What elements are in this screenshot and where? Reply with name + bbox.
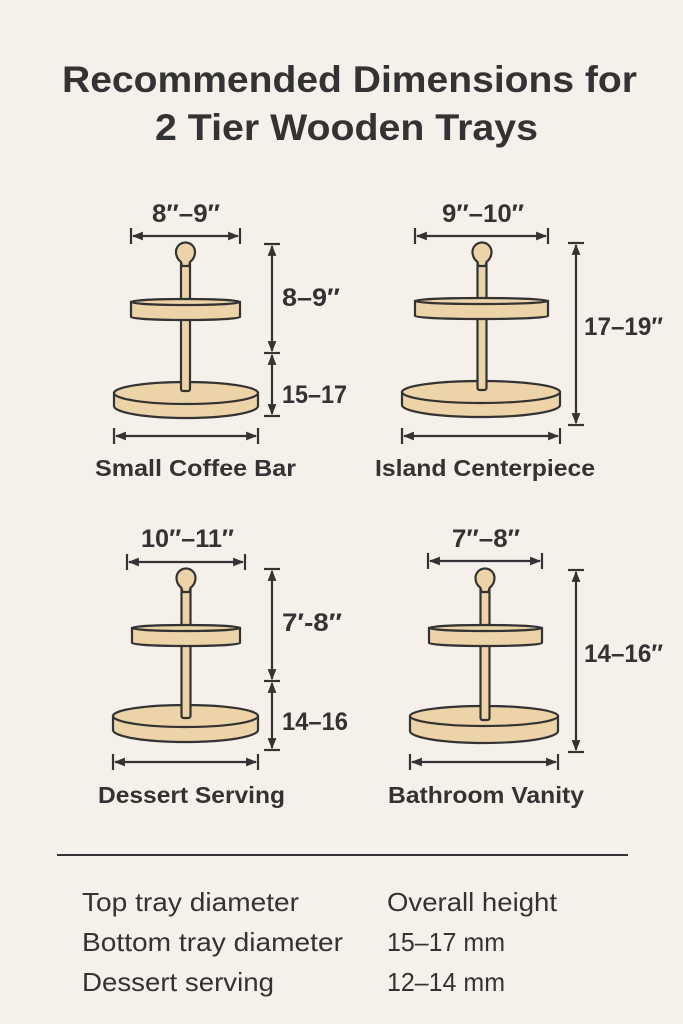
title	[62, 59, 637, 148]
panel: dessert serving: Dessert Serving	[98, 782, 285, 808]
table: dimensions	[82, 887, 558, 997]
stand illustration	[410, 568, 558, 743]
stand illustration	[113, 568, 258, 742]
panel: dessert serving: 7′-8″	[282, 609, 342, 637]
width arrow bottom	[114, 428, 258, 444]
panel: dessert serving: 14–16	[282, 708, 348, 736]
height arrows	[264, 244, 280, 416]
panel: island centerpiece: 9″–10″	[442, 200, 524, 228]
table: dimensions: Dessert serving	[82, 967, 274, 997]
stand illustration	[114, 242, 258, 418]
panel: bathroom vanity	[388, 525, 663, 808]
table: dimensions: Top tray diameter	[82, 887, 299, 917]
title: Recommended Dimensions for	[62, 59, 637, 100]
title: 2 Tier Wooden Trays	[155, 107, 538, 148]
panel: small coffee bar: 8–9″	[282, 284, 340, 312]
table: dimensions: 12–14 mm	[387, 967, 505, 997]
panel: island centerpiece: Island Centerpiece	[375, 455, 595, 481]
panel: small coffee bar: 15–17	[282, 381, 347, 409]
table: dimensions: Bottom tray diameter	[82, 927, 343, 957]
panel: small coffee bar	[95, 200, 347, 481]
table: dimensions: Overall height	[387, 887, 558, 917]
panel: bathroom vanity: 14–16″	[584, 640, 663, 668]
panel: island centerpiece	[375, 200, 663, 481]
panel: dessert serving: 10″–11″	[141, 525, 234, 553]
stand illustration	[402, 242, 560, 417]
panel: small coffee bar: 8″–9″	[152, 200, 220, 228]
panel: island centerpiece: 17–19″	[584, 313, 663, 341]
panel: bathroom vanity: Bathroom Vanity	[388, 782, 584, 808]
panel: small coffee bar: Small Coffee Bar	[95, 455, 296, 481]
width arrow top	[131, 228, 240, 244]
panel: dessert serving	[98, 525, 348, 808]
table: dimensions: 15–17 mm	[387, 927, 505, 957]
panel: bathroom vanity: 7″–8″	[452, 525, 520, 553]
